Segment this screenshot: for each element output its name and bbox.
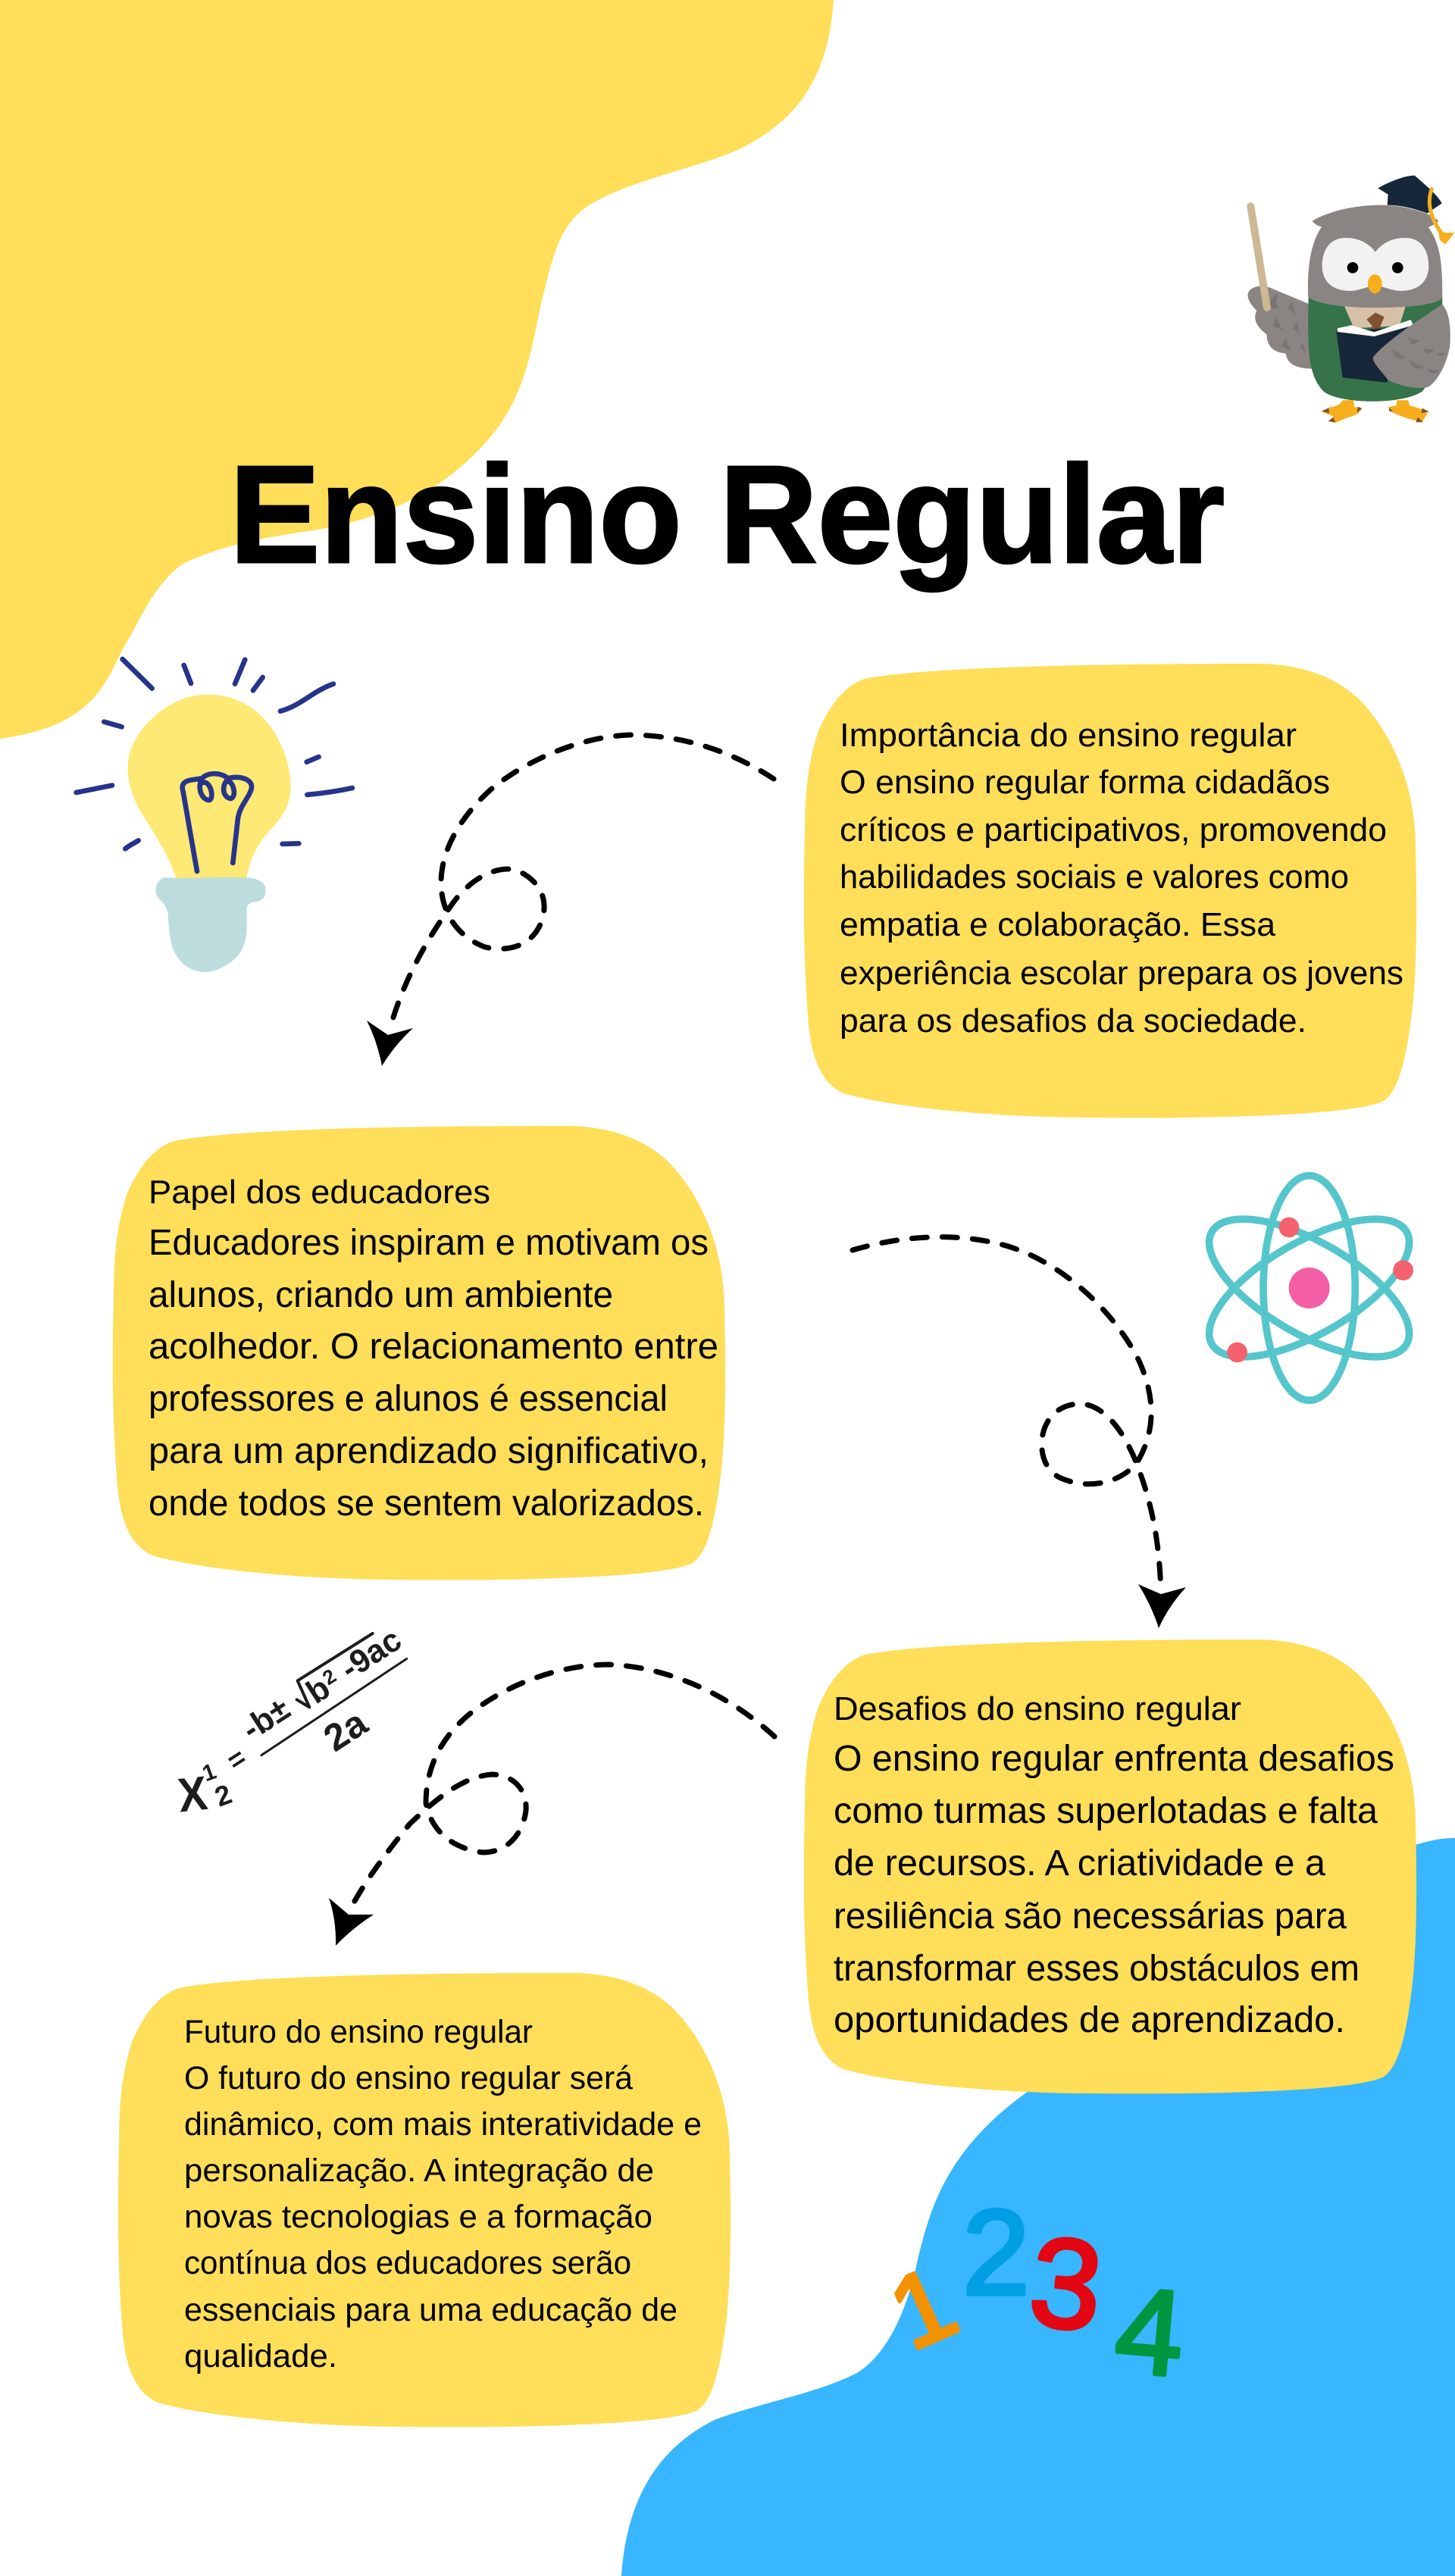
formula text: -9ac [334, 1621, 408, 1687]
text: futuro: dinâmico, com mais interatividade e [184, 2106, 702, 2143]
text: educadores: Educadores inspiram e motivam os [149, 1223, 709, 1263]
text: educadores: onde todos se sentem valorizados. [149, 1483, 704, 1524]
text: educadores: para um aprendizado significativo, [149, 1431, 709, 1471]
text: importância [840, 717, 1403, 1039]
text: futuro: novas tecnologias e a formação [184, 2199, 652, 2235]
icon: numbers 1 2 3 4: 4 [1110, 2261, 1189, 2402]
background: blue blob bottom-right [621, 1838, 1455, 2576]
formula text: 1 [199, 1759, 220, 1787]
arrow: from panel 2 to panel 3 [853, 1237, 1186, 1628]
formula text: X [175, 1767, 210, 1823]
panel: importância [804, 664, 1416, 1118]
icon: atom [1189, 1176, 1429, 1400]
formula text: = [221, 1742, 252, 1777]
text: educadores: Papel dos educadores [149, 1174, 490, 1211]
background: yellow blob top-left [0, 0, 834, 739]
text: educadores: alunos, criando um ambiente [149, 1275, 613, 1315]
text: desafios: como turmas superlotadas e falta [834, 1791, 1378, 1831]
text: importância: O ensino regular forma cidadãos [840, 764, 1330, 801]
title: Ensino Regular [230, 436, 1225, 592]
formula text: -b± [236, 1690, 296, 1748]
text: importância: para os desafios da sociedade. [840, 1002, 1306, 1039]
formula text: 2a [316, 1701, 375, 1760]
text: importância: habilidades sociais e valores como [840, 858, 1349, 896]
text: importância: experiência escolar prepara os jovens [840, 955, 1403, 992]
text: futuro: qualidade. [184, 2338, 337, 2374]
text: futuro: contínua dos educadores serão [184, 2245, 631, 2281]
text: desafios: Desafios do ensino regular [834, 1690, 1241, 1727]
icon: numbers 1 2 3 4: 3 [1024, 2209, 1109, 2359]
formula text [175, 1621, 408, 1823]
icon: numbers 1 2 3 4: 2 [962, 2184, 1030, 2320]
panel: educadores [113, 1126, 725, 1580]
icon: numbers 1 2 3 4: 1 [874, 2244, 972, 2371]
text: educadores [149, 1174, 718, 1524]
panel: desafios [804, 1640, 1416, 2093]
text: desafios: oportunidades de aprendizado. [834, 2000, 1345, 2040]
arrow: from panel 3 to panel 4 [329, 1665, 774, 1946]
text: importância: críticos e participativos, promovendo [840, 811, 1387, 849]
icon: light bulb [77, 659, 352, 972]
panel: futuro [118, 1973, 731, 2427]
formula text: 2 [211, 1778, 236, 1812]
text: futuro: personalização. A integração de [184, 2152, 654, 2189]
arrow: from panel 1 to panel 2 [367, 735, 774, 1066]
text: futuro [184, 2014, 702, 2374]
icon: numbers 1 2 3 4 [874, 2184, 1189, 2402]
text: importância: empatia e colaboração. Essa [840, 906, 1276, 943]
icon: owl teacher [1248, 176, 1454, 423]
text: desafios: de recursos. A criatividade e a [834, 1843, 1325, 1884]
text: educadores: acolhedor. O relacionamento entre [149, 1327, 718, 1367]
formula text: 2 [318, 1665, 340, 1690]
text: importância: Importância do ensino regular [840, 717, 1297, 754]
text: educadores: professores e alunos é essencial [149, 1379, 668, 1419]
text: futuro: Futuro do ensino regular [184, 2014, 533, 2050]
text: futuro: essenciais para uma educação de [184, 2292, 677, 2328]
text: desafios [834, 1690, 1394, 2040]
text: desafios: transformar esses obstáculos em [834, 1949, 1360, 1989]
formula text: b [300, 1670, 336, 1711]
icon: quadratic formula [175, 1621, 408, 1823]
text: desafios: resiliência são necessárias para [834, 1896, 1347, 1937]
text: desafios: O ensino regular enfrenta desafios [834, 1739, 1394, 1779]
text: futuro: O futuro do ensino regular será [184, 2060, 633, 2096]
